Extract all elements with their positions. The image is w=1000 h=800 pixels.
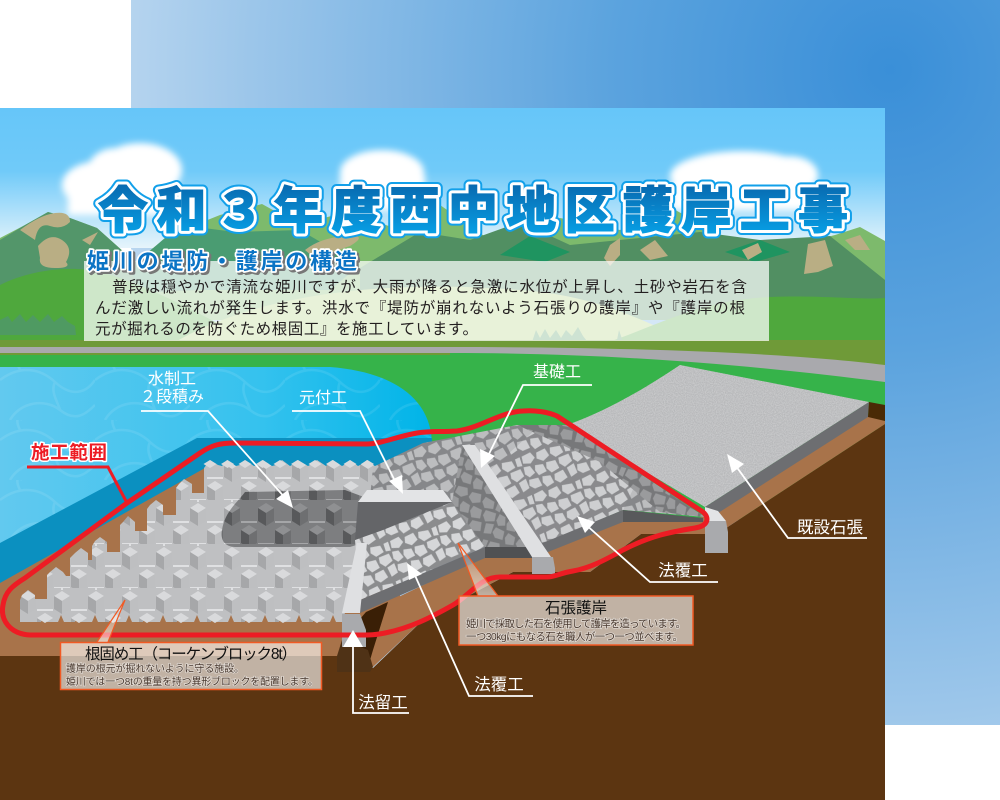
title: 令和３年度西中地区護岸工事 (98, 183, 848, 239)
clouds (62, 143, 818, 215)
sky (0, 108, 885, 248)
subtitle: 姫川の堤防・護岸の構造 (87, 249, 357, 274)
label: 水制工 2段積み: 水制工 (148, 370, 196, 388)
label: 法留工 (343, 630, 409, 713)
callout: 石張護岸: 姫川で採取した石を使用して護岸を造っています。 (466, 617, 686, 630)
road (0, 347, 885, 382)
label: 法留工: 法留工 (358, 693, 408, 712)
text box: explanation (84, 261, 769, 341)
red line: construction range (2, 411, 707, 635)
callout: 石張護岸: 一つ30kgにもなる石を職人が一つ一つ並べます。 (466, 630, 683, 643)
label: 基礎工: 基礎工 (533, 363, 581, 381)
callout: 根固め工: 護岸の根元が掘れないように守る施設。 (66, 662, 244, 675)
label: 水制工 2段積み: ２段積み (140, 388, 204, 406)
trees (0, 314, 624, 345)
subtitle: 姫川の堤防・護岸の構造 (89, 251, 359, 276)
callout: 石張護岸 (458, 543, 693, 645)
text box: explanation: 元が掘れるのを防ぐため根固工』を施工しています。 (95, 320, 478, 338)
light brown embankment (0, 468, 400, 667)
callout: 根固め工 (60, 600, 322, 690)
title: 令和３年度西中地区護岸工事 (98, 183, 848, 239)
text box: explanation: 普段は穏やかで清流な姫川ですが、大雨が降ると急激に水位が上昇し、土砂や岩石を含 (112, 278, 747, 296)
label: 元付工: 元付工 (299, 389, 347, 407)
stone revetment 石張護岸 (355, 425, 705, 613)
label: 施工範囲 (27, 442, 127, 503)
water edge band (0, 438, 432, 590)
label: 水制工 2段積み (140, 370, 293, 508)
light brown band under revetment (373, 415, 885, 667)
label: 基礎工 (480, 363, 592, 468)
callout: 根固め工: 姫川では一つ8tの重量を持つ異形ブロックを配置します。 (66, 675, 318, 688)
callout: 石張護岸: 石張護岸 (545, 599, 607, 617)
dark brown ground (0, 424, 885, 800)
existing stone pavement 既設石張 (567, 365, 885, 515)
label: 施工範囲: 施工範囲 (31, 442, 107, 463)
panel: main illustration (0, 108, 885, 800)
dark hollow beside footing (342, 602, 388, 667)
background: blue gradient panel (131, 0, 1000, 725)
right end block (705, 507, 728, 553)
foreground hills (0, 269, 885, 345)
label: 法覆工 lower (407, 563, 533, 696)
title: 令和３年度西中地区護岸工事 (98, 183, 848, 239)
label: 法覆工 right (577, 516, 718, 582)
lawn (0, 350, 885, 520)
river water (0, 367, 432, 600)
text box: explanation: んだ激しい流れが発生します。洪水で『堤防が崩れないよう石張りの護岸』や『護岸の根 (95, 299, 745, 317)
callout: 根固め工: 根固め工（コーケンブロック8t） (85, 644, 297, 663)
label: 既設石張 (727, 454, 867, 538)
ribs: 基礎工 (462, 445, 555, 574)
label: 元付工 (292, 389, 403, 494)
mountains (0, 204, 885, 320)
rib: 法留工 footing (342, 543, 367, 647)
元付工 abutment (355, 490, 452, 540)
river bank strip (0, 340, 885, 372)
label: 既設石張: 既設石張 (797, 518, 864, 537)
label: 法覆工 right: 法覆工 (658, 561, 708, 580)
foot protection blocks 根固め工 (20, 460, 375, 623)
label: 法覆工 lower: 法覆工 (474, 675, 524, 694)
darker double-stacked blocks 水制工 (222, 490, 372, 547)
